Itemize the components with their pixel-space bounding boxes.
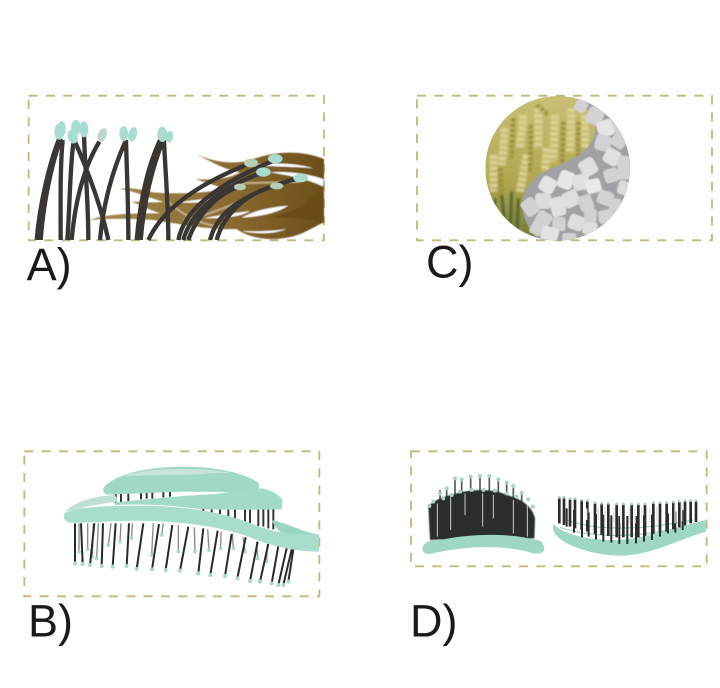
brush handle back [272,520,319,540]
panel D dashed frame [411,451,707,566]
right brush pin tips [559,497,696,504]
brush middle layer [115,488,282,510]
panel D: brush front and underside [410,451,707,647]
right brush light pins [587,503,682,523]
panel B dashed frame [24,451,319,596]
left brush base [422,535,544,554]
brush top layer upper face [125,469,232,476]
bristle tips [54,120,308,190]
right brush grid lines [560,520,693,535]
back bristle tips [79,535,267,562]
panel C: wheat and pellets [417,93,712,288]
brush top layer [103,467,259,494]
brush front layer [64,506,319,552]
brush middle layer rear rim [65,495,118,512]
left brush dark stems above mass [440,475,522,507]
pellets half [522,98,630,241]
front bristle tips [75,563,288,585]
right brush front bristles [567,508,683,544]
label A: A) [27,239,72,290]
left brush pins [437,493,527,537]
right brush base [553,520,706,556]
wheat half [485,95,632,242]
label D: D) [410,596,457,647]
right brush back bristles [559,498,696,537]
back bristles [79,523,267,562]
infographic [23,94,713,646]
panel B: brush side view [24,451,319,647]
panel A: bristles and hair [27,96,324,290]
bristles [37,135,298,240]
label B: B) [28,596,73,647]
front bristles [75,523,293,585]
left brush pin tips [429,476,533,507]
hair strands [90,153,324,239]
upper bristles [116,490,273,529]
panel C dashed frame [417,96,712,240]
yin-yang disc [485,93,638,245]
label C: C) [426,237,473,288]
panel A dashed frame [29,96,324,240]
left brush bristle mass [428,490,535,540]
